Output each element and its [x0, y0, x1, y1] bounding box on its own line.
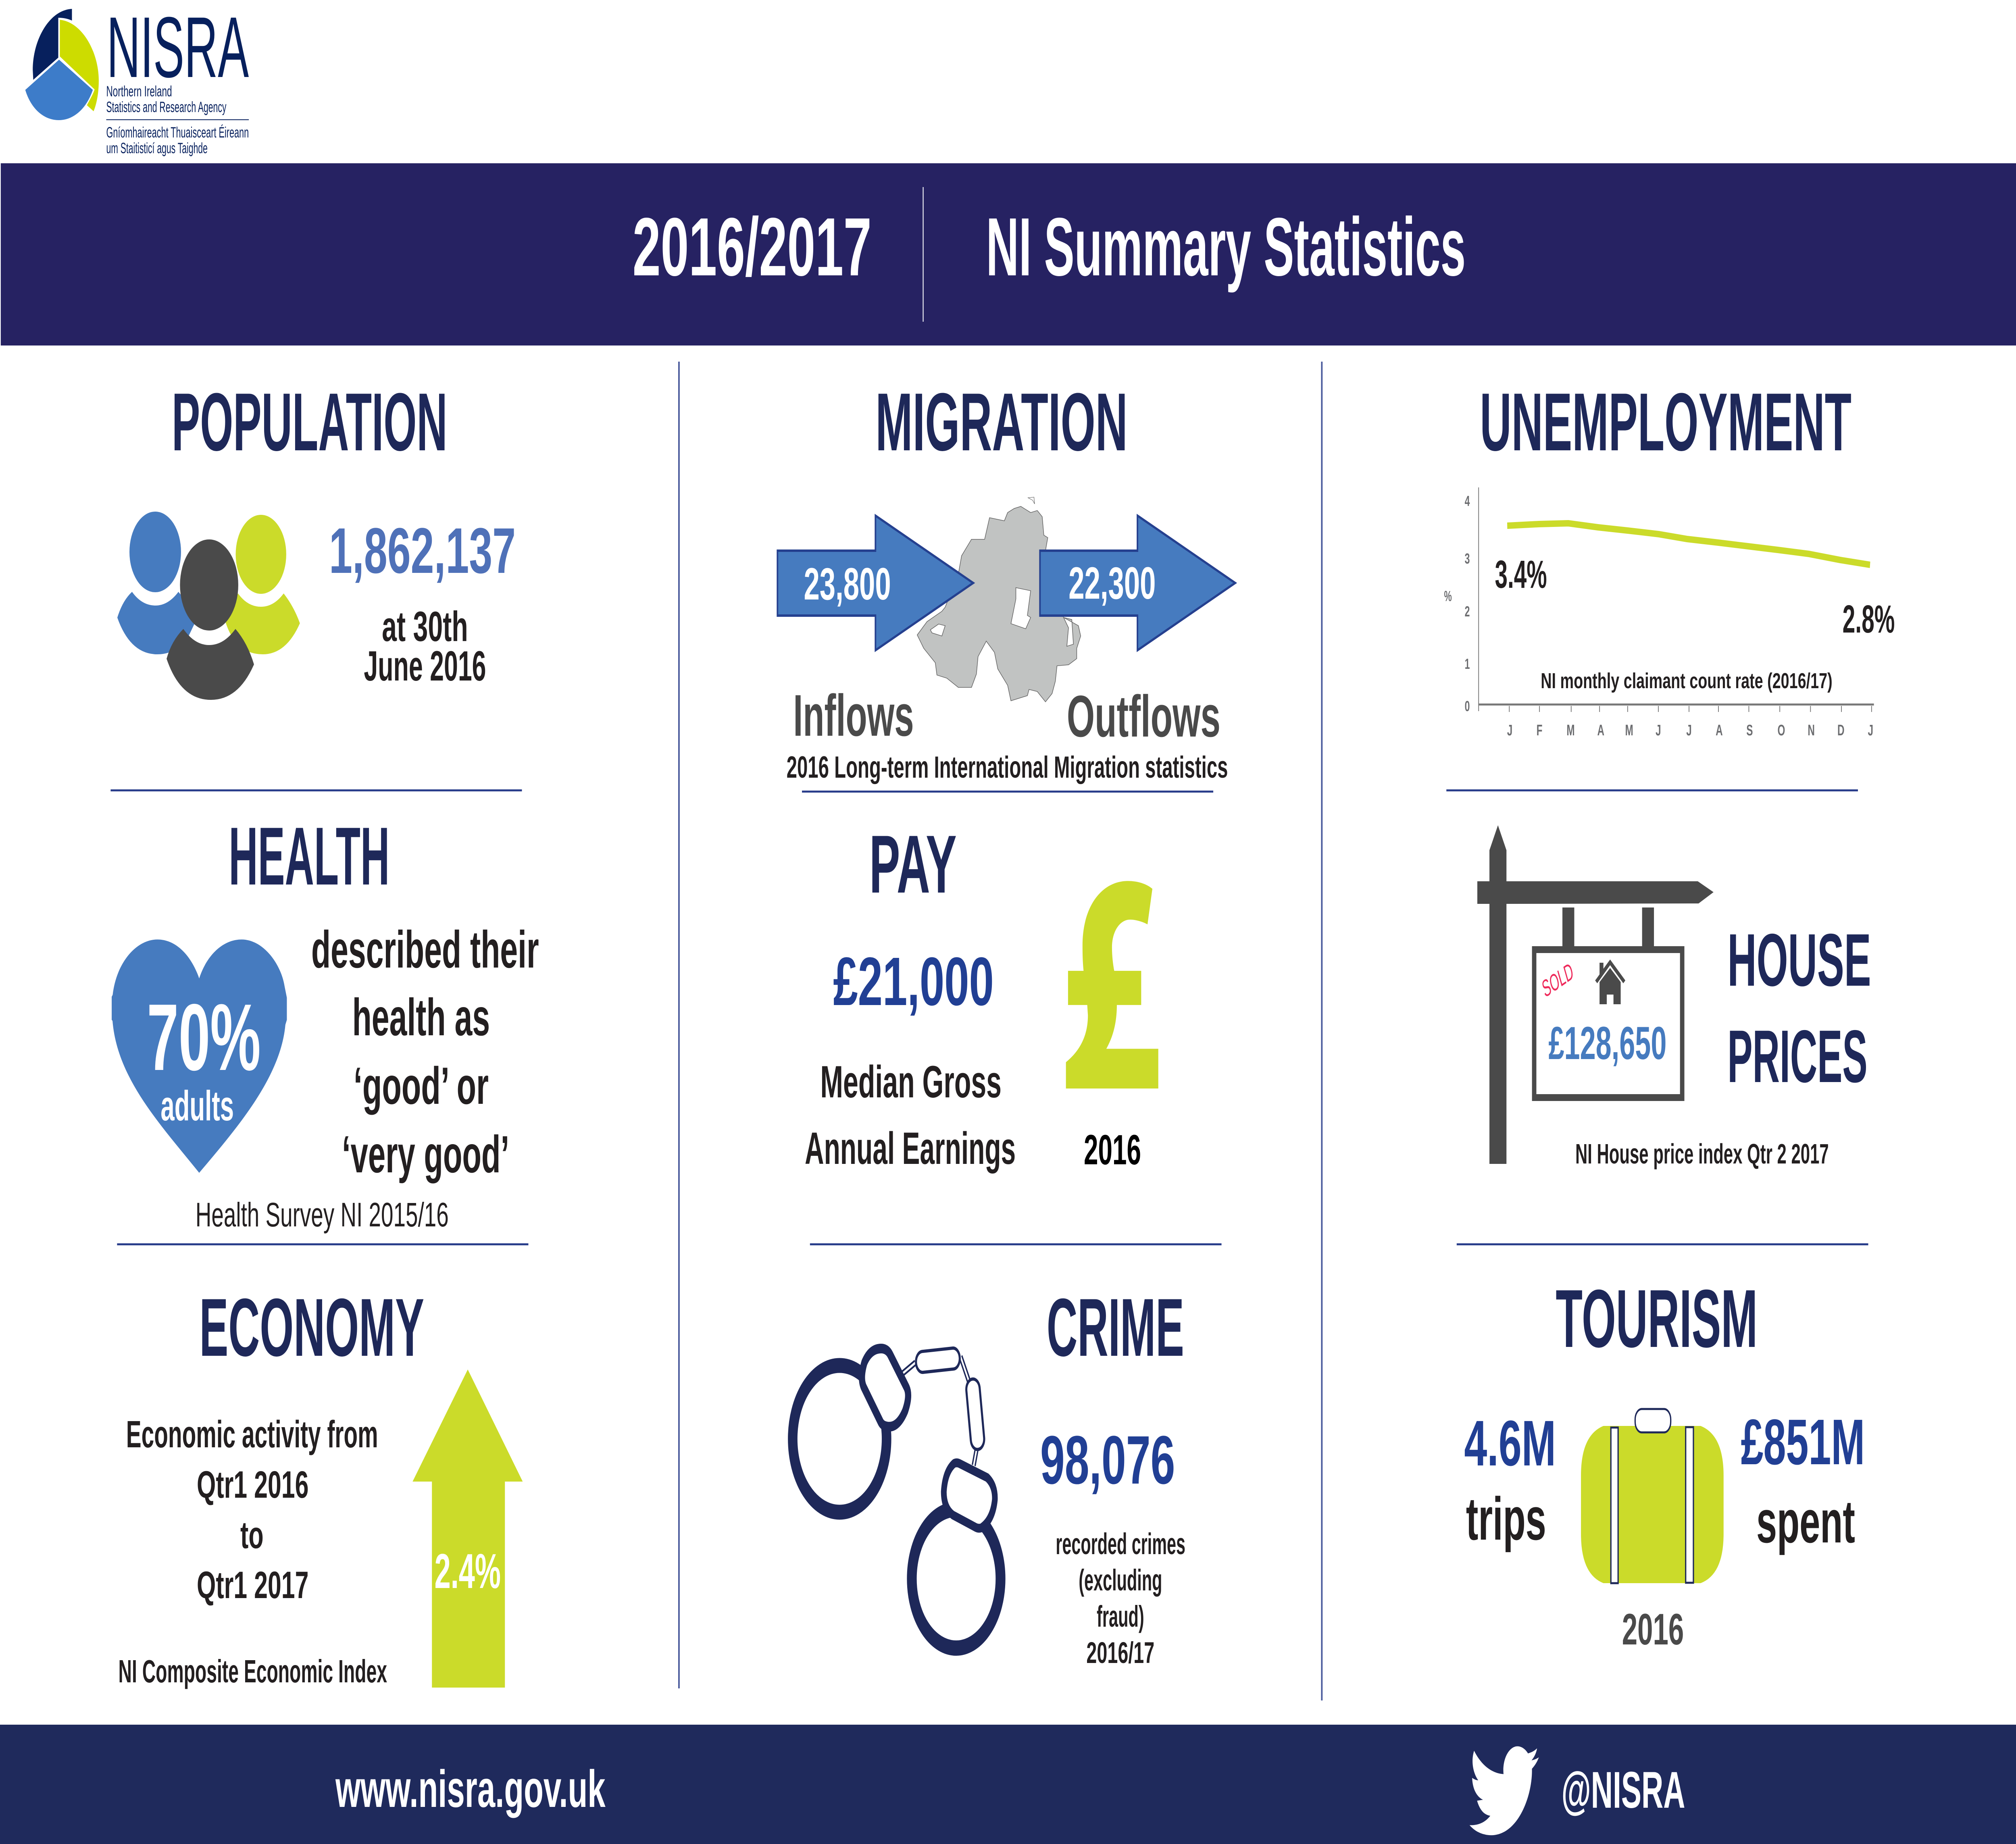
health description: health as: [352, 988, 490, 1047]
icon: twitter bird: [1470, 1746, 1539, 1835]
NISRA logo: [25, 0, 249, 156]
icon: heart with 70% adults: 70%: [147, 984, 261, 1090]
line chart: claimant count rate: A: [1597, 721, 1604, 739]
crime description: [1056, 1528, 1185, 1670]
population date: June 2016: [364, 642, 486, 690]
line chart: claimant count rate: J: [1868, 721, 1873, 739]
line chart: claimant count rate: %: [1444, 589, 1452, 604]
trips figure: [1464, 1407, 1556, 1553]
heading: migration: MIGRATION: [875, 377, 1128, 468]
label: inflows: Inflows: [793, 683, 914, 748]
line chart: claimant count rate: 4: [1465, 493, 1470, 509]
economy description: Qtr1 2016: [197, 1463, 309, 1506]
population figure: 1,862,137: [329, 515, 516, 587]
spend figure: [1741, 1406, 1865, 1555]
heading: pay: PAY: [869, 819, 957, 910]
heading: house prices: HOUSE: [1727, 918, 1871, 1001]
arrow: economy up 2.4%: 2.4%: [435, 1543, 501, 1598]
heading: health: HEALTH: [229, 811, 389, 902]
NISRA logo: Statistics and Research Agency: [106, 99, 227, 115]
line chart: claimant count rate: J: [1507, 721, 1512, 739]
health description: ‘very good’: [342, 1125, 509, 1184]
economy description: Qtr1 2017: [197, 1563, 309, 1606]
heading: tourism: TOURISM: [1556, 1273, 1758, 1365]
footer band: [0, 1725, 2016, 1844]
line chart: claimant count rate: A: [1716, 721, 1723, 739]
health description: ‘good’ or: [354, 1057, 489, 1116]
house price source: NI House price index Qtr 2 2017: [1575, 1138, 1829, 1170]
line chart: claimant count rate: 3.4%: [1495, 553, 1547, 596]
icon: handcuffs: [793, 1347, 1000, 1648]
line chart: claimant count rate: M: [1625, 721, 1633, 739]
icon: suitcase: [1581, 1409, 1724, 1583]
crime description: fraud): [1097, 1600, 1144, 1634]
line chart: claimant count rate: 3: [1465, 551, 1470, 567]
line chart: claimant count rate: M: [1566, 721, 1575, 739]
line chart: claimant count rate: S: [1746, 721, 1753, 739]
arrow: outflows: [1040, 516, 1235, 650]
icon: three people: [117, 512, 300, 700]
icon: pound sign: [1066, 881, 1158, 1089]
crime figure: 98,076: [1040, 1422, 1175, 1499]
NISRA logo: Northern Ireland: [106, 83, 172, 100]
icon: sold sign: [1477, 825, 1714, 1164]
pay description: Median Gross: [820, 1057, 1002, 1107]
icon: heart with 70% adults: [112, 939, 287, 1173]
heading: house prices: PRICES: [1727, 1014, 1868, 1098]
health description: described their: [311, 920, 539, 979]
panel: health: [112, 811, 539, 1234]
arrow: outflows: 22,300: [1068, 558, 1156, 608]
population date: at 30th: [382, 603, 468, 650]
panel: unemployment: [1444, 377, 1895, 739]
health source: Health Survey NI 2015/16: [196, 1196, 449, 1234]
icon: sold sign: SOLD: [1539, 957, 1576, 1003]
economy description: Economic activity from: [126, 1413, 378, 1455]
title banner: 2016/2017: [633, 201, 872, 293]
line chart: claimant count rate: 2.8%: [1843, 597, 1895, 641]
pay year: 2016: [1084, 1126, 1141, 1174]
spend figure: spent: [1756, 1488, 1855, 1555]
tourism year: 2016: [1622, 1604, 1684, 1654]
line chart: claimant count rate: J: [1686, 721, 1692, 739]
line chart: claimant count rate: [1444, 487, 1895, 739]
heading: house prices: [1727, 918, 1871, 1098]
label: outflows: Outflows: [1067, 683, 1220, 749]
arrow: inflows: 23,800: [804, 559, 891, 609]
heading: crime: CRIME: [1047, 1282, 1184, 1374]
pay description: [805, 1057, 1016, 1174]
icon: heart with 70% adults: adults: [160, 1082, 234, 1130]
panel: crime: [793, 1282, 1185, 1670]
panel: tourism: [1464, 1273, 1865, 1654]
title banner: NI Summary Statistics: [986, 201, 1466, 293]
migration source: 2016 Long-term International Migration statistics: [787, 750, 1228, 785]
line chart: claimant count rate: O: [1778, 721, 1785, 739]
icon: Northern Ireland map: [917, 497, 1081, 702]
health description: [311, 920, 539, 1184]
economy description: to: [240, 1513, 264, 1556]
panel: economy: [119, 1282, 523, 1690]
crime description: (excluding: [1079, 1564, 1162, 1597]
pay figure: £21,000: [833, 944, 994, 1020]
NISRA logo: NISRA: [107, 0, 249, 96]
arrow: inflows: [777, 516, 973, 650]
NISRA logo: um Staitisticí agus Taighde: [106, 140, 208, 156]
line chart: claimant count rate: D: [1837, 721, 1845, 739]
line chart: claimant count rate: J: [1656, 721, 1661, 739]
icon: sold sign: £128,650: [1548, 1018, 1666, 1069]
panel: pay: [805, 819, 1158, 1174]
crime description: recorded crimes: [1056, 1528, 1185, 1561]
panel: house prices: [1477, 825, 1871, 1170]
line chart: claimant count rate: N: [1808, 721, 1815, 739]
line chart: claimant count rate: 1: [1465, 656, 1470, 672]
crime description: 2016/17: [1086, 1636, 1154, 1670]
line chart: claimant count rate: 2: [1465, 604, 1470, 620]
heading: population: POPULATION: [172, 377, 448, 468]
title banner: [1, 163, 2016, 345]
pay description: Annual Earnings: [805, 1123, 1016, 1174]
spend figure: £851M: [1741, 1406, 1865, 1478]
line chart: claimant count rate: NI monthly claimant count rate (2016/17): [1541, 668, 1833, 693]
panel: migration: [777, 377, 1235, 785]
line chart: claimant count rate: 0: [1465, 699, 1470, 714]
arrow: economy up 2.4%: [412, 1369, 523, 1688]
panel: population: [117, 377, 516, 700]
economy description: [126, 1413, 378, 1606]
twitter handle: @NISRA: [1561, 1761, 1685, 1819]
trips figure: trips: [1466, 1485, 1546, 1553]
population date: [364, 603, 486, 690]
NISRA logo: Gníomhaireacht Thuaisceart Éireann: [106, 124, 249, 141]
trips figure: 4.6M: [1464, 1407, 1556, 1480]
website link: www.nisra.gov.uk: [335, 1760, 606, 1819]
line chart: claimant count rate: F: [1537, 721, 1543, 739]
heading: unemployment: UNEMPLOYMENT: [1480, 377, 1851, 468]
economy source: NI Composite Economic Index: [119, 1654, 387, 1690]
heading: economy: ECONOMY: [199, 1282, 424, 1374]
